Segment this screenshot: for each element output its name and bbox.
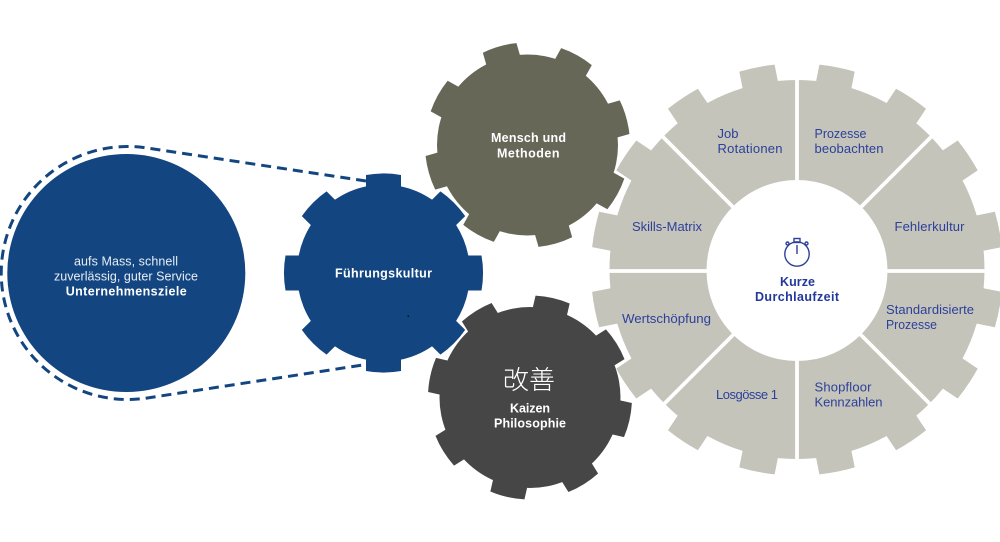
- label: Standardisierte Prozesse: Standardisierte: [886, 302, 974, 317]
- kanji: Kaizen characters: 改善: [503, 360, 555, 397]
- center title: Kurze Durchlaufzeit: Kurze: [780, 275, 815, 289]
- label: Unternehmensziele text: [54, 254, 198, 298]
- label: Wertschöpfung: Wertschöpfung: [622, 311, 711, 326]
- center title: Kurze Durchlaufzeit: Durchlaufzeit: [755, 290, 840, 304]
- label: Kaizen Philosophie: Philosophie: [494, 416, 566, 430]
- label: Prozesse beobachten: beobachten: [814, 141, 884, 156]
- gear: Kurze Durchlaufzeit segmented grey gear: [580, 50, 1000, 490]
- gear: Kaizen Philosophie: [427, 294, 633, 501]
- label: Mensch und Methoden: Methoden: [497, 146, 560, 160]
- label: Job Rotationen: Job: [718, 126, 738, 141]
- label: Kaizen Philosophie: Kaizen: [510, 402, 550, 416]
- gear: Mensch und Methoden: [424, 42, 631, 248]
- label: Shopfloor Kennzahlen: Kennzahlen: [814, 394, 882, 410]
- label: Unternehmensziele text: aufs Mass, schnell: [74, 254, 178, 268]
- label: Prozesse beobachten: Prozesse: [814, 126, 866, 141]
- label: Shopfloor Kennzahlen: Shopfloor: [814, 380, 872, 394]
- gear: Führungskultur: [284, 173, 483, 373]
- label: Standardisierte Prozesse: Prozesse: [886, 317, 937, 332]
- connector: dashed belt: [1, 147, 366, 400]
- label: Mensch und Methoden: Mensch und: [491, 131, 566, 145]
- label: Losgösse 1: Losgösse 1: [716, 387, 778, 402]
- label: Führungskultur: Führungskultur: [335, 266, 432, 280]
- circle: Unternehmensziele: [7, 154, 245, 392]
- label: Unternehmensziele text: zuverlässig, guter Service: [54, 270, 198, 284]
- label: Fehlerkultur: Fehlerkultur: [894, 219, 965, 234]
- icon: stopwatch: [785, 238, 809, 266]
- label: Job Rotationen: Rotationen: [718, 141, 782, 156]
- label: Unternehmensziele text: Unternehmensziele: [66, 284, 187, 298]
- label: Skills-Matrix: Skills-Matrix: [632, 219, 702, 234]
